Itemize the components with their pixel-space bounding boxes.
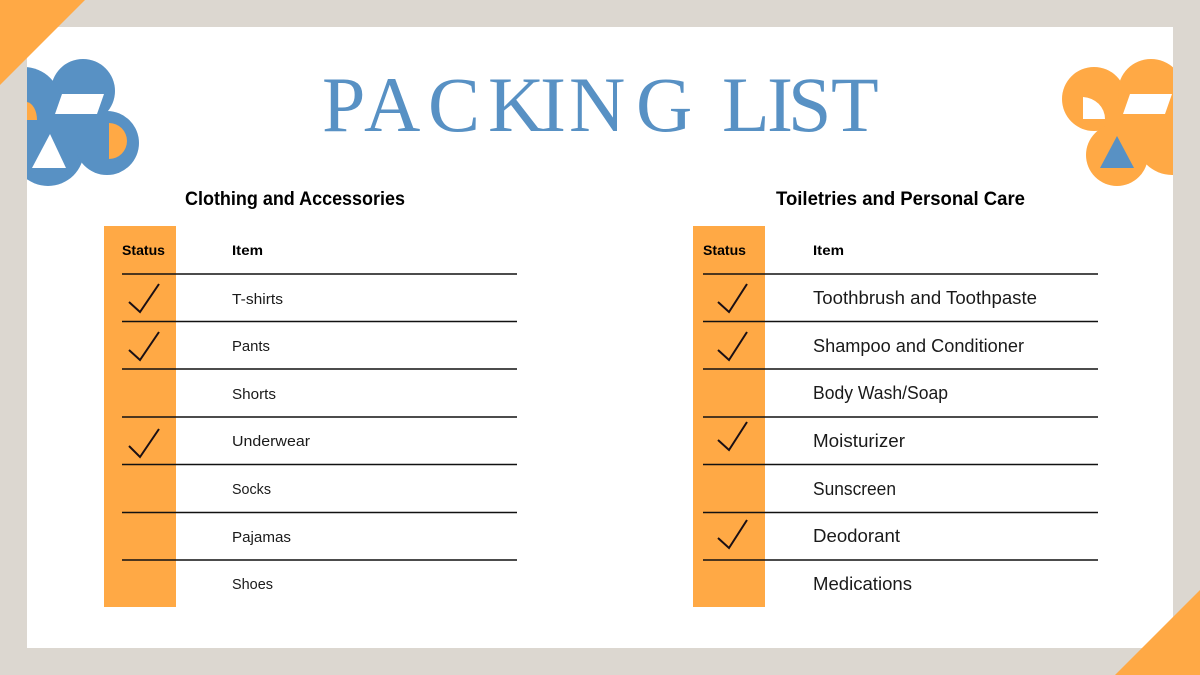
item names: Shoes <box>232 577 273 593</box>
item names: Underwear <box>232 434 310 450</box>
item names: Deodorant <box>813 526 900 546</box>
corner triangle: top left <box>0 0 85 85</box>
item names: Pajamas <box>232 530 291 546</box>
item names: Shorts <box>232 387 276 403</box>
item names: Sunscreen <box>813 479 896 499</box>
status column <box>693 226 765 607</box>
heading: clothing: Clothing and Accessories <box>185 189 405 210</box>
icon: orange shapes cluster <box>1062 59 1173 186</box>
heading: toiletries: Toiletries and Personal Care <box>776 189 1025 210</box>
corner triangle: bottom right <box>1115 590 1200 675</box>
item names: T-shirts <box>232 292 283 308</box>
table header <box>703 242 844 258</box>
item names: Socks <box>232 482 271 498</box>
item names <box>232 292 310 593</box>
panel: clothing and accessories <box>104 189 517 607</box>
item names: Pants <box>232 339 270 355</box>
table header: Status <box>122 242 165 258</box>
item names: Medications <box>813 574 912 594</box>
icon: blue shapes cluster <box>27 59 139 186</box>
check marks <box>718 284 747 548</box>
status column <box>104 226 176 607</box>
table header <box>122 242 263 258</box>
table header: Item <box>232 242 263 258</box>
title: PACKING LIST <box>322 61 879 148</box>
table header: Status <box>703 242 746 258</box>
item names: Shampoo and Conditioner <box>813 336 1024 356</box>
item names: Toothbrush and Toothpaste <box>813 288 1037 308</box>
table header: Item <box>813 242 844 258</box>
item names: Body Wash/Soap <box>813 383 948 403</box>
item names <box>813 288 1037 594</box>
check marks <box>129 284 159 457</box>
panel: toiletries and personal care <box>693 189 1098 607</box>
row lines <box>703 274 1098 560</box>
row lines <box>122 274 517 560</box>
item names: Moisturizer <box>813 431 905 451</box>
